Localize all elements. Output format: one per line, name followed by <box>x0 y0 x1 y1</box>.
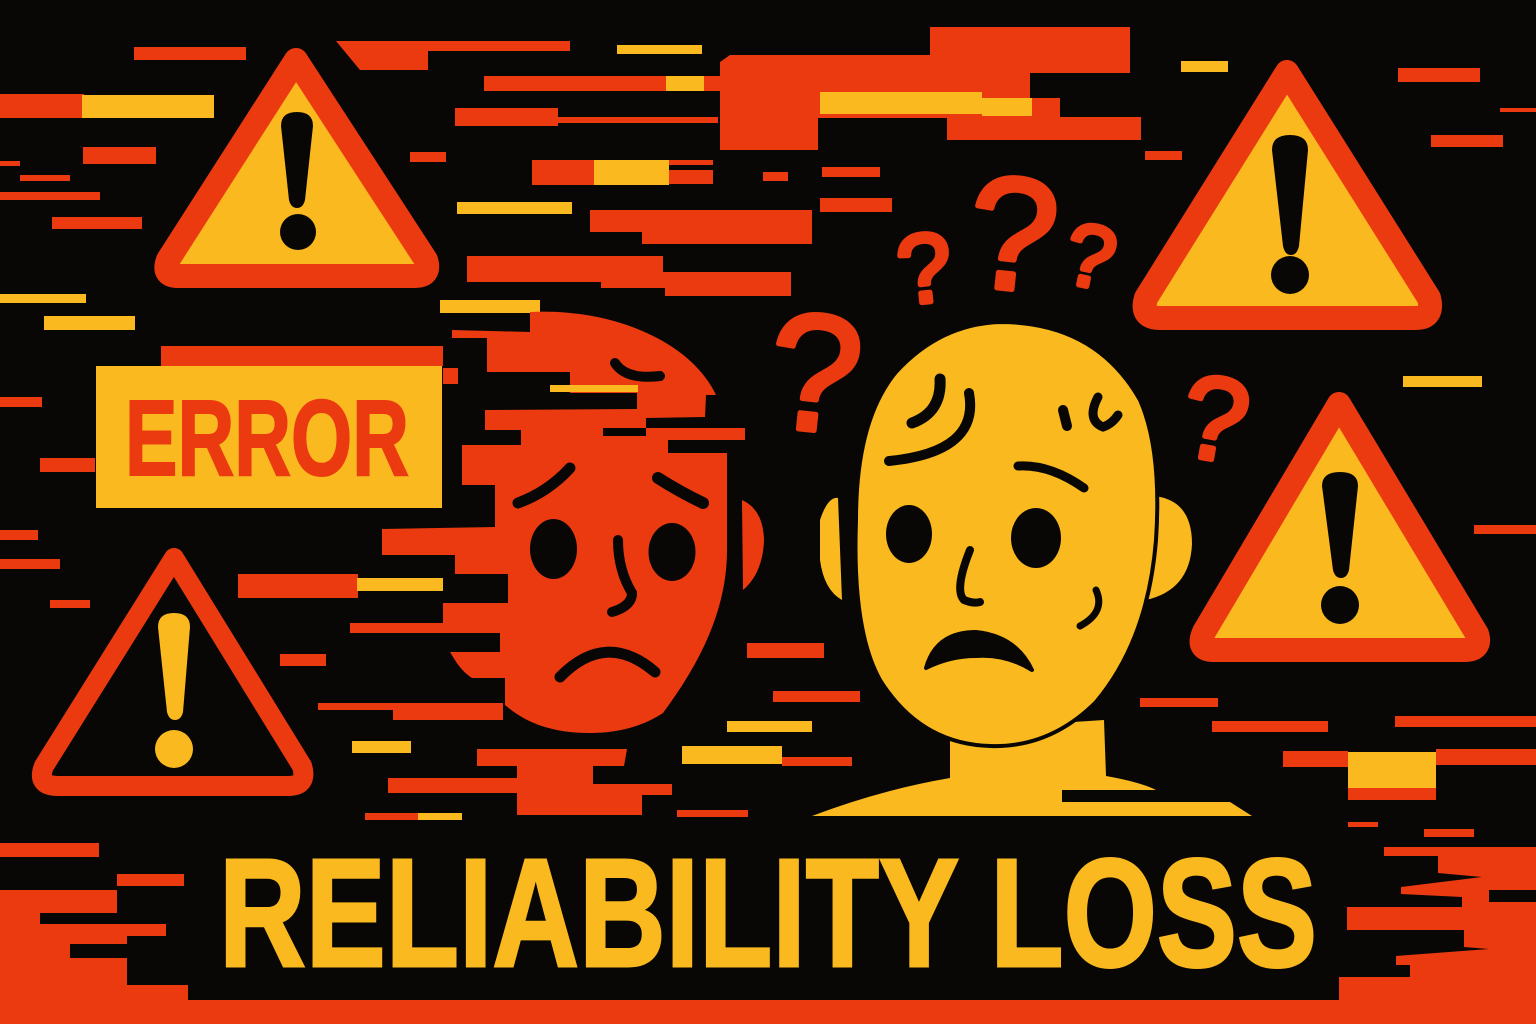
question marks: ? <box>959 140 1066 327</box>
icon: warning triangle bottom left (outlined) <box>42 558 303 786</box>
glitch streaks: yellow <box>0 45 1482 820</box>
yellow worried face <box>812 322 1252 816</box>
icon: warning triangle right <box>1202 404 1478 650</box>
question marks: ? <box>759 277 870 471</box>
question marks: ? <box>892 211 957 326</box>
error label: ERROR <box>125 377 409 498</box>
error label <box>96 366 442 508</box>
black cut at right edge <box>1489 890 1536 902</box>
question marks <box>759 140 1259 490</box>
red glitched face <box>350 312 764 733</box>
bottom red mass <box>0 843 1536 1024</box>
icon: warning triangle top left <box>166 60 427 276</box>
question marks: ? <box>1056 203 1125 310</box>
icon: warning triangle top right <box>1145 72 1430 318</box>
question marks: ? <box>1171 349 1259 490</box>
